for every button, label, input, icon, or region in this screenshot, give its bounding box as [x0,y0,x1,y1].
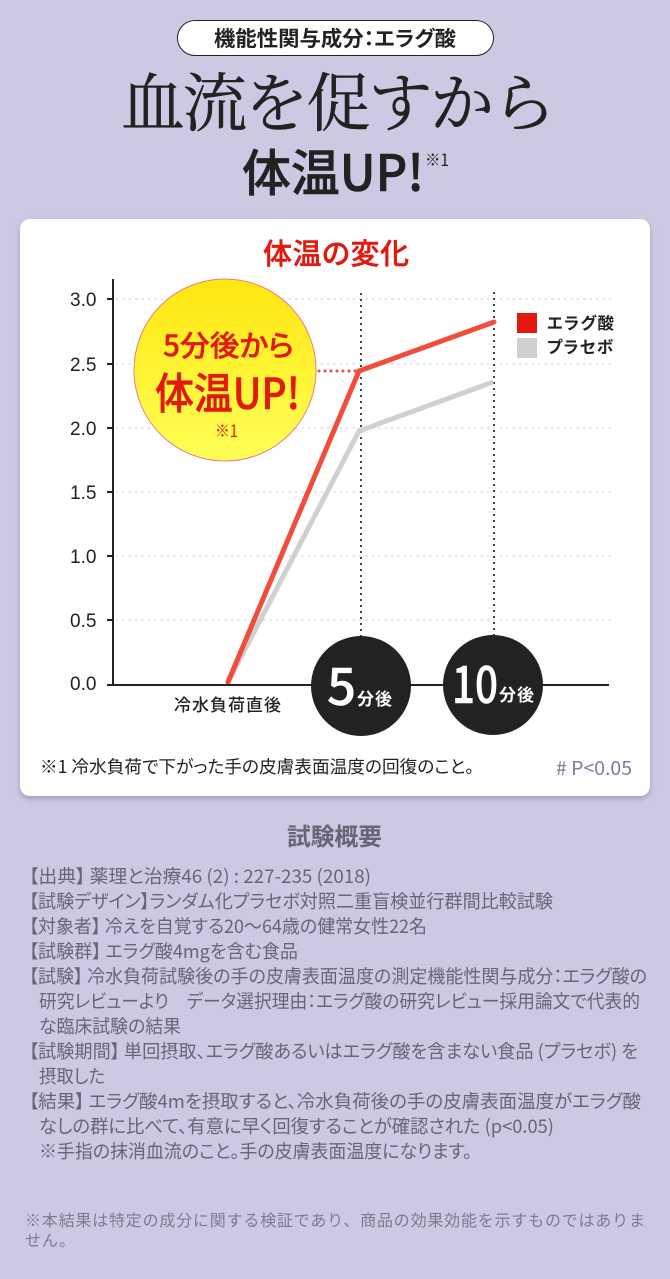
study details text: 【試験群】 エラグ酸4mgを含む食品 [29,938,298,964]
line chart: 1.5 [70,483,96,504]
line chart: 3.0 [70,290,96,311]
x marker: 5 minutes: 分後 [357,685,392,710]
callout badge [134,279,316,461]
line chart: 2.0 [70,419,96,440]
footnote: ※1 冷水負荷で下がった手の皮膚表面温度の回復のこと。 [40,754,474,779]
title [121,53,556,206]
study details text: 【試験】 冷水負荷試験後の手の皮膚表面温度の測定機能性関与成分：エラグ酸の [29,963,647,989]
x marker: 10 minutes: 分後 [499,681,534,706]
title: ※1 [425,146,449,171]
callout badge: 体温UP! [155,360,300,422]
line chart [70,279,614,695]
study details text: なしの群に比べて、有意に早く回復することが確認された (p<0.05) [39,1113,554,1139]
significance note: # P<0.05 [556,754,632,781]
label pill: functional ingredient: 機能性関与成分：エラグ酸 [214,23,456,53]
heading: study overview: 試験概要 [287,817,382,852]
line chart: 1.0 [70,547,96,568]
legend: エラグ酸 [547,310,614,334]
study details text: ※手指の抹消血流のこと。手の皮膚表面温度になります。 [39,1138,472,1164]
study details text: 【試験期間】 単回摂取、エラグ酸あるいはエラグ酸を含まない食品 (プラセボ) を [29,1038,638,1064]
x label: immediately after cold load: 冷水負荷直後 [174,691,281,716]
line chart: 2.5 [70,355,96,376]
disclaimer: ※本結果は特定の成分に関する検証であり、商品の効果効能を示すものではありま [25,1207,645,1231]
study details text: 【結果】 エラグ酸4mを摂取すると、冷水負荷後の手の皮膚表面温度がエラグ酸 [29,1088,641,1114]
x marker: 10 minutes: 10 [452,646,498,718]
line chart: 0.5 [70,611,96,632]
x marker: 5 minutes [311,636,411,736]
title: 体温UP! [242,134,424,206]
label pill: functional ingredient [178,20,494,56]
callout badge: ※1 [215,417,238,442]
title: 血流を促すから [121,53,556,145]
disclaimer [25,1207,645,1251]
x marker: 5 minutes: 5 [327,648,356,720]
legend [517,310,614,358]
chart heading: 体温の変化 [263,231,409,273]
study details text: な臨床試験の結果 [39,1013,181,1039]
study details text: 【試験デザイン】ランダム化プラセボ対照二重盲検並行群間比較試験 [29,888,553,914]
study details text: 研究レビューより データ選択理由：エラグ酸の研究レビュー採用論文で代表的 [39,988,640,1014]
disclaimer: せん。 [25,1227,75,1251]
callout badge: 5分後から [163,323,294,365]
study details text: 【出典】 薬理と治療46 (2) : 227-235 (2018) [29,863,371,889]
study details text [29,863,647,1164]
line chart: 0.0 [70,674,96,695]
panel: body temperature chart [20,219,650,796]
x marker: 10 minutes [443,635,543,735]
legend: プラセボ [547,334,614,358]
study details text: 【対象者】 冷えを自覚する20〜64歳の健常女性22名 [29,913,427,939]
study details text: 摂取した [39,1063,105,1089]
